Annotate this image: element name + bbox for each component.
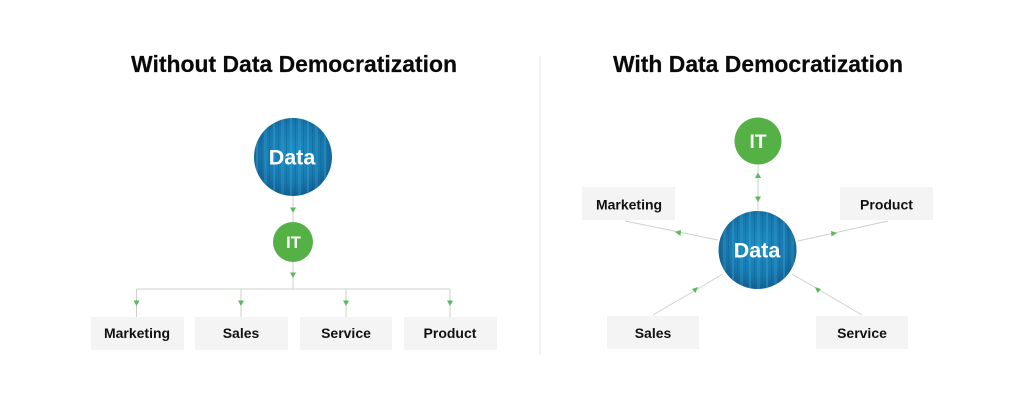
box: Marketing — [582, 187, 675, 220]
box: Service — [816, 316, 908, 349]
arrowheads: outward and two-way — [675, 172, 837, 293]
box: Service: Service — [837, 325, 887, 341]
Data circle — [254, 118, 332, 196]
panel: without data democratization — [91, 51, 497, 350]
box: Product — [840, 187, 933, 220]
box: Sales — [195, 317, 288, 350]
divider — [539, 56, 541, 355]
box: Sales — [607, 316, 699, 349]
IT circle top — [734, 118, 782, 164]
Data circle hub — [718, 211, 796, 289]
heading: without: Without Data Democratization — [131, 51, 457, 77]
box: Marketing: Marketing — [104, 325, 170, 341]
box: Service — [300, 317, 392, 350]
box: Service: Service — [321, 325, 371, 341]
box: Sales: Sales — [223, 325, 260, 341]
heading: with: With Data Democratization — [613, 51, 903, 77]
IT circle top: IT — [750, 132, 767, 153]
box: Product: Product — [860, 196, 913, 212]
Data circle hub: Data — [734, 238, 781, 262]
Data circle: Data — [269, 146, 316, 170]
arrowheads: downward — [134, 208, 453, 306]
box: Marketing: Marketing — [596, 196, 662, 212]
box: Product: Product — [424, 325, 477, 341]
box: Marketing — [91, 317, 184, 350]
connectors: hierarchy tree — [136, 196, 450, 317]
IT circle: IT — [286, 234, 301, 252]
IT circle — [273, 222, 313, 262]
panel: with data democratization — [582, 51, 933, 349]
connectors: hub and spoke — [625, 165, 888, 315]
box: Sales: Sales — [635, 325, 672, 341]
box: Product — [404, 317, 497, 350]
